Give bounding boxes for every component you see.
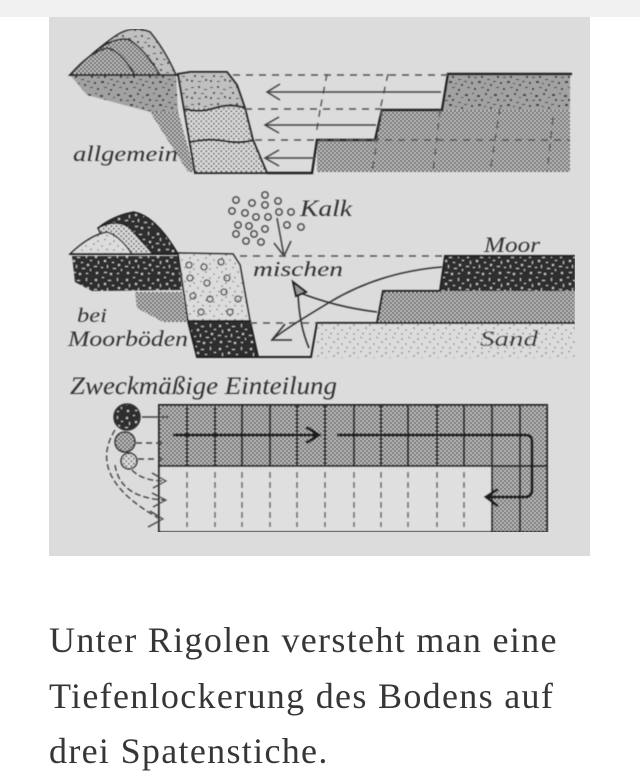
excavated block layers	[178, 72, 245, 108]
dashed layer lines	[240, 256, 445, 323]
icon: lime granules	[229, 192, 304, 256]
arrow: working direction	[173, 427, 532, 506]
hatched strips	[159, 405, 547, 532]
label: Moorböden: Moorböden	[67, 326, 188, 351]
caption text	[49, 620, 558, 771]
label: Kalk: Kalk	[299, 196, 353, 221]
undug soil on the right	[442, 74, 570, 110]
caption text: drei Spatenstiche.	[49, 731, 329, 771]
arrows: layers moved	[265, 84, 441, 166]
panel: illustration of trenching	[49, 17, 590, 556]
label: mischen: mischen	[253, 257, 343, 281]
icon: soil layer circles	[114, 404, 140, 469]
diagram: moor soils	[67, 212, 575, 358]
ground under mound	[70, 75, 178, 112]
caption text: Tiefenlockerung des Bodens auf	[49, 676, 554, 716]
label: Sand: Sand	[480, 326, 539, 351]
dashed strip lines	[187, 472, 464, 527]
mound	[70, 29, 178, 75]
arrows: mixing	[272, 267, 442, 348]
label: allgemein: allgemein	[73, 141, 178, 166]
soil under mound	[72, 256, 182, 291]
grid	[159, 405, 547, 532]
moor and sand layers	[440, 256, 575, 291]
top browser bar	[0, 0, 640, 17]
caption text: Unter Rigolen versteht man eine	[49, 620, 558, 660]
dashed layer lines	[233, 74, 570, 172]
label: Moor: Moor	[483, 232, 540, 257]
mound	[70, 212, 178, 254]
mixed block with lime	[178, 253, 250, 321]
diagram: field plan	[107, 404, 547, 532]
heading: Zweckmäßige Einteilung: Zweckmäßige Einteilung	[70, 373, 337, 400]
terrain outline	[258, 256, 575, 357]
arrowhead	[293, 282, 306, 296]
diagram: general trenching	[70, 29, 572, 173]
label: bei: bei	[77, 305, 107, 327]
arrows: soil placement	[107, 417, 168, 527]
terrain outline	[267, 74, 572, 173]
